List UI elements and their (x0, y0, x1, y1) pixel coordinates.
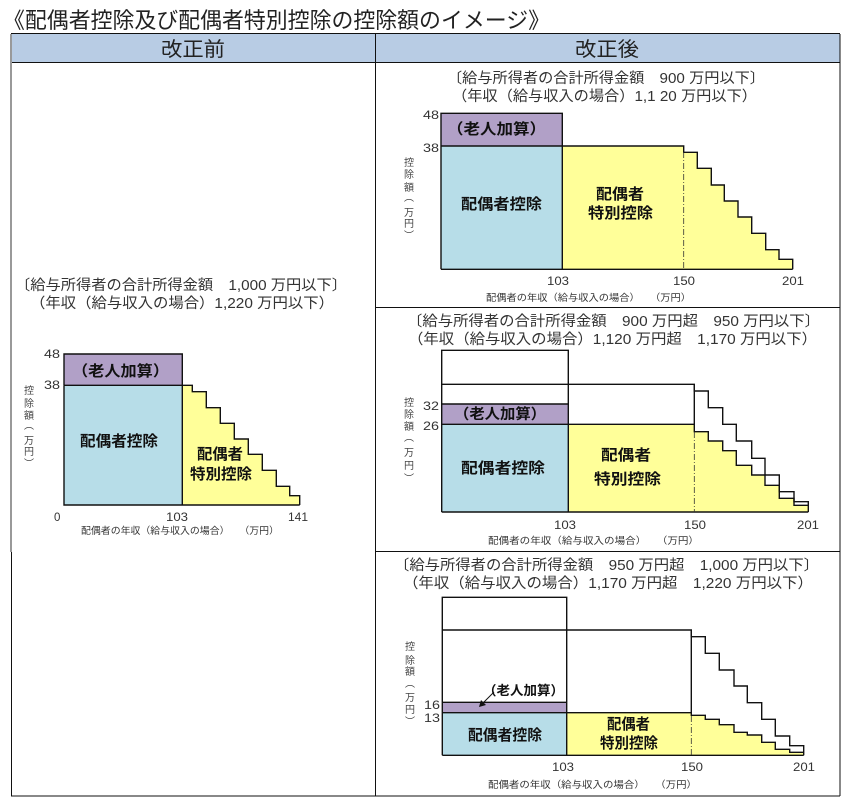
chart: up to 9 million yen: 38 (423, 143, 439, 155)
chart: 9.5 to 10 million yen: 13 (424, 713, 440, 725)
chart: before revision: 除 (24, 397, 34, 410)
chart: 9.5 to 10 million yen (405, 597, 815, 791)
condition text (407, 313, 820, 348)
chart: before revision: 控 (24, 384, 34, 397)
chart: 9 to 9.5 million yen: 26 (423, 421, 439, 433)
chart: up to 9 million yen: 150 (673, 276, 695, 288)
chart: up to 9 million yen: （老人加算） (447, 120, 546, 138)
chart: before revision: 0 (54, 512, 60, 524)
chart: before revision: 配偶者の年収（給与収入の場合） （万円） (81, 525, 279, 537)
chart: up to 9 million yen: 48 (423, 110, 439, 122)
chart: 9 to 9.5 million yen: 万 (404, 448, 414, 459)
chart: before revision: 額 (24, 409, 34, 422)
chart: 9 to 9.5 million yen: 控 (404, 396, 414, 409)
panel: before revision (15, 277, 347, 537)
chart: 9.5 to 10 million yen: 除 (405, 654, 415, 667)
panel: after revision, 9 to 9.5 million yen (404, 313, 820, 547)
chart: up to 9 million yen (404, 110, 804, 304)
callout: senior addition with arrow: （老人加算） (483, 683, 564, 698)
chart: 9 to 9.5 million yen: ︵ (404, 433, 414, 444)
chart: 9.5 to 10 million yen: 配偶者控除 (468, 727, 542, 744)
chart: 9.5 to 10 million yen: 16 (424, 700, 440, 712)
chart: before revision: 48 (44, 349, 60, 361)
chart: up to 9 million yen: 配偶者 (596, 186, 644, 203)
chart: before revision: 配偶者控除 (80, 433, 158, 450)
chart: 9.5 to 10 million yen: 控 (405, 640, 415, 653)
chart: 9 to 9.5 million yen: 円 (404, 461, 414, 472)
column header: before revision: 改正前 (161, 38, 225, 61)
chart: 9.5 to 10 million yen: 万 (405, 693, 415, 704)
chart: up to 9 million yen: 配偶者控除 (461, 196, 542, 213)
callout: senior addition with arrow (479, 683, 564, 707)
panel: after revision, up to 9 million yen (404, 70, 804, 304)
chart: 9.5 to 10 million yen: 150 (681, 762, 703, 774)
chart: 9 to 9.5 million yen: 配偶者の年収（給与収入の場合） （万円） (488, 535, 699, 547)
chart: 9 to 9.5 million yen: 103 (554, 520, 576, 532)
chart: 9.5 to 10 million yen: ︶ (405, 716, 415, 728)
chart: up to 9 million yen: 円 (404, 219, 414, 230)
condition text: 〔給与所得者の合計所得金額 1,000 万円以下〕 (15, 277, 347, 294)
condition text: 〔給与所得者の合計所得金額 900 万円超 950 万円以下〕 (407, 313, 820, 330)
condition text: （年収（給与収入の場合）1,220 万円以下） (30, 295, 334, 312)
chart: before revision: 103 (166, 512, 188, 524)
chart: up to 9 million yen: ︶ (404, 230, 414, 242)
chart: up to 9 million yen: 特別控除 (588, 204, 653, 222)
chart: 9.5 to 10 million yen: 103 (552, 762, 574, 774)
chart: before revision: 円 (24, 447, 34, 458)
chart: 9 to 9.5 million yen: （老人加算） (454, 405, 546, 423)
chart: 9 to 9.5 million yen: 額 (404, 420, 414, 433)
chart: up to 9 million yen: 額 (404, 181, 414, 194)
chart: 9.5 to 10 million yen: 円 (405, 705, 415, 716)
chart: 9 to 9.5 million yen: 32 (423, 401, 439, 413)
chart: 9.5 to 10 million yen: 配偶者の年収（給与収入の場合） （万円） (488, 779, 697, 791)
chart: 9 to 9.5 million yen: 150 (684, 520, 706, 532)
chart: up to 9 million yen: 201 (782, 276, 804, 288)
chart: before revision (24, 349, 308, 537)
condition text (15, 277, 347, 312)
condition text (394, 557, 819, 592)
chart: up to 9 million yen: 除 (404, 168, 414, 181)
chart: before revision: 配偶者 (197, 446, 243, 463)
condition text: （年収（給与収入の場合）1,1 20 万円以下） (452, 88, 757, 105)
condition text: 〔給与所得者の合計所得金額 950 万円超 1,000 万円以下〕 (394, 557, 819, 574)
chart: up to 9 million yen: ︵ (404, 193, 414, 204)
chart: before revision: 38 (44, 380, 60, 392)
chart: before revision: ︶ (24, 458, 34, 470)
chart: 9 to 9.5 million yen: 配偶者 (601, 447, 651, 464)
chart: up to 9 million yen: 103 (547, 276, 569, 288)
chart: 9.5 to 10 million yen: 特別控除 (600, 734, 658, 752)
chart: up to 9 million yen: 配偶者の年収（給与収入の場合） （万円） (486, 292, 691, 304)
title: 《配偶者控除及び配偶者特別控除の控除額のイメージ》 (3, 8, 550, 33)
chart: before revision: 万 (24, 436, 34, 447)
condition text: （年収（給与収入の場合）1,120 万円超 1,170 万円以下） (408, 331, 817, 348)
condition text: 〔給与所得者の合計所得金額 900 万円以下〕 (447, 70, 765, 87)
chart: before revision: ︵ (24, 421, 34, 432)
chart: 9 to 9.5 million yen (404, 350, 819, 547)
chart: 9 to 9.5 million yen: 201 (797, 520, 819, 532)
chart: before revision: （老人加算） (72, 362, 169, 380)
chart: 9.5 to 10 million yen: 配偶者 (607, 716, 650, 733)
chart: 9 to 9.5 million yen: ︶ (404, 473, 414, 485)
chart: 9 to 9.5 million yen: 配偶者控除 (461, 460, 545, 477)
panel: after revision, 9.5 to 10 million yen (394, 557, 819, 791)
chart: 9.5 to 10 million yen: 額 (405, 665, 415, 678)
chart: 9.5 to 10 million yen: 201 (793, 762, 815, 774)
chart: before revision: 141 (288, 512, 308, 524)
chart: up to 9 million yen: 控 (404, 156, 414, 169)
column header: after revision: 改正後 (575, 38, 639, 61)
condition text (447, 70, 765, 105)
chart: 9 to 9.5 million yen: 特別控除 (594, 470, 661, 488)
condition text: （年収（給与収入の場合）1,170 万円超 1,220 万円以下） (403, 575, 813, 592)
chart: 9 to 9.5 million yen: 除 (404, 408, 414, 421)
chart: before revision: 特別控除 (190, 465, 252, 483)
chart: up to 9 million yen: 万 (404, 208, 414, 219)
chart: 9.5 to 10 million yen: ︵ (405, 679, 415, 690)
